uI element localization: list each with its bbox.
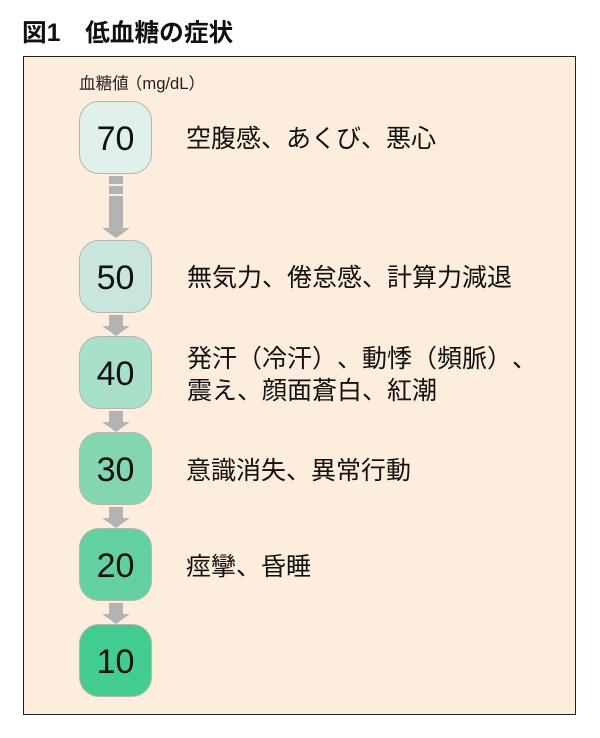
- symptom text: 40: 発汗（冷汗）、動悸（頻脈）、: [187, 345, 537, 373]
- symptom text: 40: 震え、顔面蒼白、紅潮: [187, 377, 437, 405]
- arrow: 50 to 40: [102, 315, 130, 336]
- level box: 20: [79, 528, 152, 601]
- arrow: 40 to 30: [102, 411, 130, 432]
- arrow: 20 to 10: [102, 603, 130, 624]
- symptom text: 20: 痙攣、昏睡: [186, 553, 311, 581]
- symptom text: 70: 空腹感、あくび、悪心: [186, 125, 436, 153]
- axis label: 血糖値（mg/dL）: [79, 74, 205, 93]
- symptom text: 50: 無気力、倦怠感、計算力減退: [187, 264, 512, 292]
- title: 図1 低血糖の症状: [22, 20, 233, 47]
- level box: 10: [79, 624, 152, 697]
- level box: 10: 10: [97, 643, 134, 681]
- symptom text: 30: 意識消失、異常行動: [186, 457, 411, 485]
- level box: 30: [79, 432, 152, 505]
- arrow: 70 to 50, dashed: [102, 176, 130, 238]
- arrow: 30 to 20: [102, 507, 130, 528]
- level box: 50: [79, 240, 152, 313]
- level box: 70: [79, 101, 152, 174]
- level box: 70: 70: [97, 120, 134, 158]
- level box: 30: 30: [97, 451, 134, 489]
- symptom text: 40: [187, 345, 537, 405]
- level box: 40: 40: [97, 355, 134, 393]
- level box: 50: 50: [97, 259, 134, 297]
- level box: 40: [79, 336, 152, 409]
- level box: 20: 20: [97, 547, 134, 585]
